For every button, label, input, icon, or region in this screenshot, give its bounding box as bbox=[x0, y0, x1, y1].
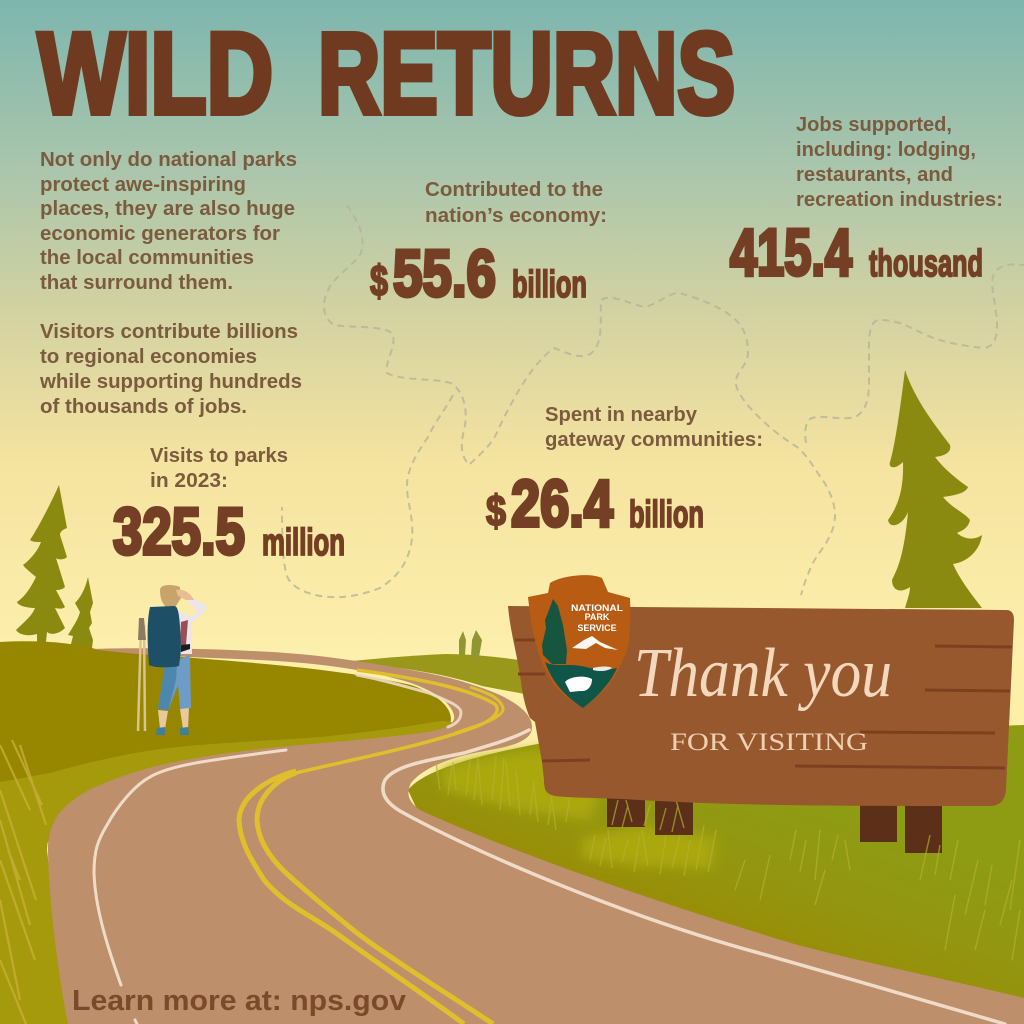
stat: jobs supported: including: lodging, bbox=[796, 139, 976, 161]
far hill with distant hikers bbox=[343, 630, 530, 695]
large pine tree bbox=[888, 370, 982, 608]
intro text block: to regional economies bbox=[40, 346, 257, 368]
intro text block: protect awe-inspiring bbox=[40, 174, 246, 196]
stat: jobs supported: restaurants, and bbox=[796, 164, 953, 186]
sky background bbox=[0, 0, 1024, 660]
title bbox=[38, 10, 735, 138]
emblem wording: NATIONAL bbox=[571, 603, 624, 613]
left foreground grass tufts bbox=[0, 740, 46, 1024]
intro text block: while supporting hundreds bbox=[39, 371, 302, 393]
stat: economy contribution bbox=[370, 179, 607, 310]
intro text block: the local communities bbox=[40, 247, 254, 269]
legs bbox=[158, 655, 191, 711]
intro text block: Not only do national parks bbox=[40, 149, 297, 171]
intro text block: of thousands of jobs. bbox=[40, 396, 247, 418]
road yellow centre lines bbox=[239, 670, 503, 1024]
intro text block bbox=[39, 149, 302, 418]
backpack bbox=[148, 606, 181, 667]
script thank you: Thank you bbox=[634, 635, 892, 712]
stat: economy contribution: 55.6 bbox=[393, 236, 496, 310]
stat: visits to parks: 325.5 bbox=[113, 494, 245, 568]
stat: gateway communities: gateway communities: bbox=[545, 429, 763, 451]
stat: jobs supported: recreation industries: bbox=[796, 189, 1003, 211]
stat: visits to parks: million bbox=[262, 522, 345, 564]
stat: gateway communities: $ bbox=[486, 487, 506, 536]
stat: visits to parks: Visits to parks bbox=[150, 445, 288, 467]
stat: economy contribution: billion bbox=[512, 264, 587, 306]
for visiting text: FOR VISITING bbox=[670, 729, 868, 756]
stat: gateway communities: billion bbox=[629, 494, 704, 536]
intro text block: that surround them. bbox=[40, 272, 233, 294]
stat: visits to parks: in 2023: bbox=[150, 470, 228, 492]
emblem wording: SERVICE bbox=[577, 623, 617, 633]
dashed trail lines bbox=[282, 205, 1024, 597]
head bbox=[160, 585, 181, 607]
left pine trees bbox=[16, 485, 93, 648]
emblem wording: PARK bbox=[585, 612, 610, 622]
stat: economy contribution: $ bbox=[370, 257, 388, 306]
wood grain lines bbox=[515, 640, 1012, 768]
left hill bbox=[0, 641, 451, 1024]
road white edge lines bbox=[94, 675, 1005, 1024]
title: RETURNS bbox=[318, 10, 735, 138]
bright grass patches bbox=[440, 750, 716, 868]
trekking poles bbox=[138, 625, 145, 731]
sign posts bbox=[607, 795, 942, 853]
wooden sign board bbox=[508, 606, 1014, 806]
right grass blades bbox=[436, 756, 1020, 960]
stat: gateway communities: Spent in nearby bbox=[545, 404, 698, 426]
stat: jobs supported bbox=[730, 114, 1003, 289]
lighter grass verge bbox=[0, 721, 454, 1024]
stat: visits to parks bbox=[113, 445, 345, 568]
footer link text: Learn more at: nps.gov bbox=[72, 985, 406, 1017]
intro text block: Visitors contribute billions bbox=[40, 321, 298, 343]
hiker bbox=[138, 585, 207, 735]
stat: jobs supported: Jobs supported, bbox=[796, 114, 952, 136]
title: WILD bbox=[38, 10, 273, 138]
intro text block: places, they are also huge bbox=[40, 198, 295, 220]
stat: gateway communities: 26.4 bbox=[511, 466, 613, 540]
calves and shoes bbox=[158, 708, 189, 729]
torso and raised arm bbox=[176, 596, 207, 654]
stat: economy contribution: nation’s economy: bbox=[425, 205, 607, 227]
winding road bbox=[48, 648, 1024, 1024]
NPS arrowhead emblem bbox=[528, 575, 630, 708]
right grass field bbox=[408, 725, 1024, 1006]
stat: jobs supported: 415.4 bbox=[730, 215, 852, 289]
intro text block: economic generators for bbox=[40, 223, 280, 245]
stat: gateway communities bbox=[486, 404, 763, 540]
stat: economy contribution: Contributed to the bbox=[425, 179, 603, 201]
